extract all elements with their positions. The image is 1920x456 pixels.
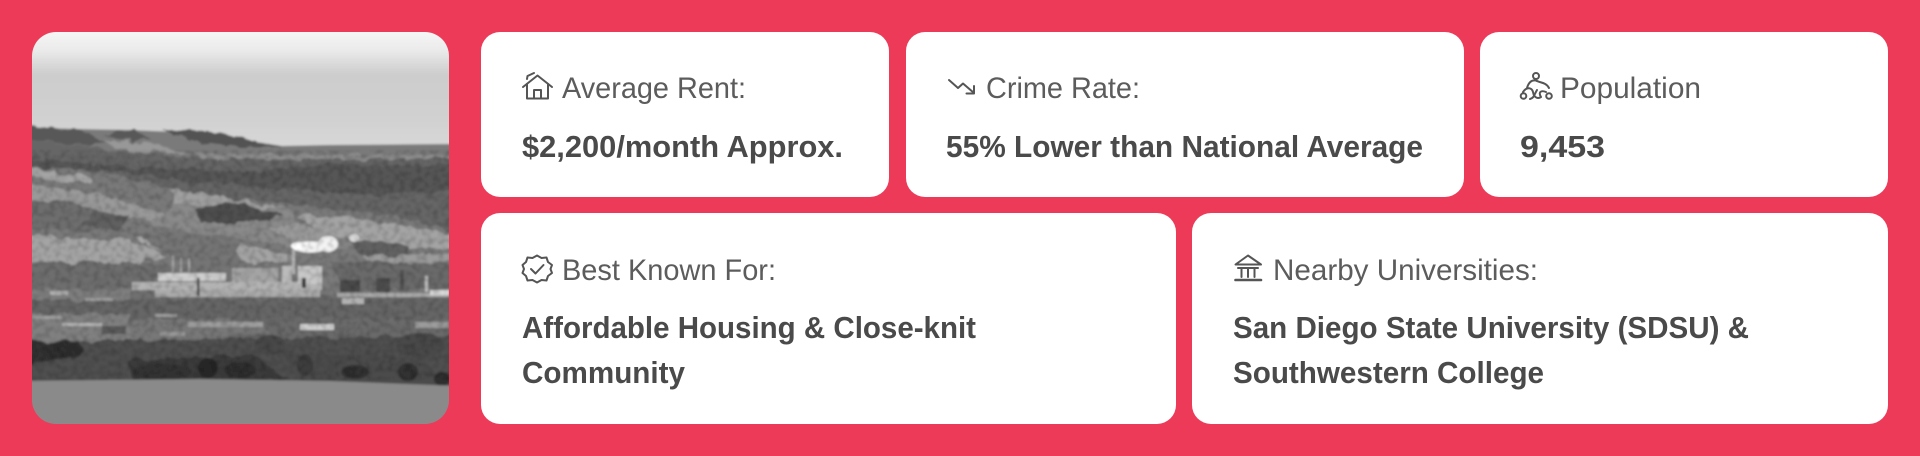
factory smoke bbox=[291, 234, 359, 252]
town buildings bbox=[32, 291, 449, 336]
label: best known for: Best Known For: bbox=[562, 254, 776, 287]
card: average rent bbox=[481, 32, 889, 197]
foreground field bbox=[32, 377, 449, 424]
label: nearby universities: Nearby Universities: bbox=[1273, 254, 1538, 287]
photo: hillside town with factory bbox=[32, 32, 449, 424]
value: nearby universities: San Diego State University (SDSU) & bbox=[1233, 311, 1749, 345]
icon: university building bbox=[1236, 256, 1261, 280]
card: nearby universities bbox=[1192, 213, 1888, 424]
card: best known for bbox=[481, 213, 1176, 424]
value: best known for: Community bbox=[522, 356, 685, 390]
trees bbox=[40, 333, 450, 386]
value: crime rate: 55% Lower than National Average bbox=[946, 130, 1423, 164]
value: best known for: Affordable Housing & Close-knit bbox=[522, 311, 976, 345]
value: nearby universities: Southwestern College bbox=[1233, 356, 1544, 390]
card: crime rate bbox=[906, 32, 1464, 197]
factory bbox=[132, 250, 449, 304]
texture bbox=[20, 150, 460, 380]
icon: trending down arrow bbox=[949, 80, 974, 94]
card: population bbox=[1480, 32, 1888, 197]
label: crime rate: Crime Rate: bbox=[986, 72, 1140, 105]
icon: verified badge bbox=[522, 256, 552, 282]
icon: house bbox=[523, 73, 552, 98]
value: population: 9,453 bbox=[1520, 130, 1605, 164]
icon: people group bbox=[1521, 73, 1552, 99]
label: average rent: Average Rent: bbox=[562, 72, 746, 105]
value: average rent: $2,200/month Approx. bbox=[522, 130, 843, 164]
label: population: Population bbox=[1560, 72, 1701, 105]
